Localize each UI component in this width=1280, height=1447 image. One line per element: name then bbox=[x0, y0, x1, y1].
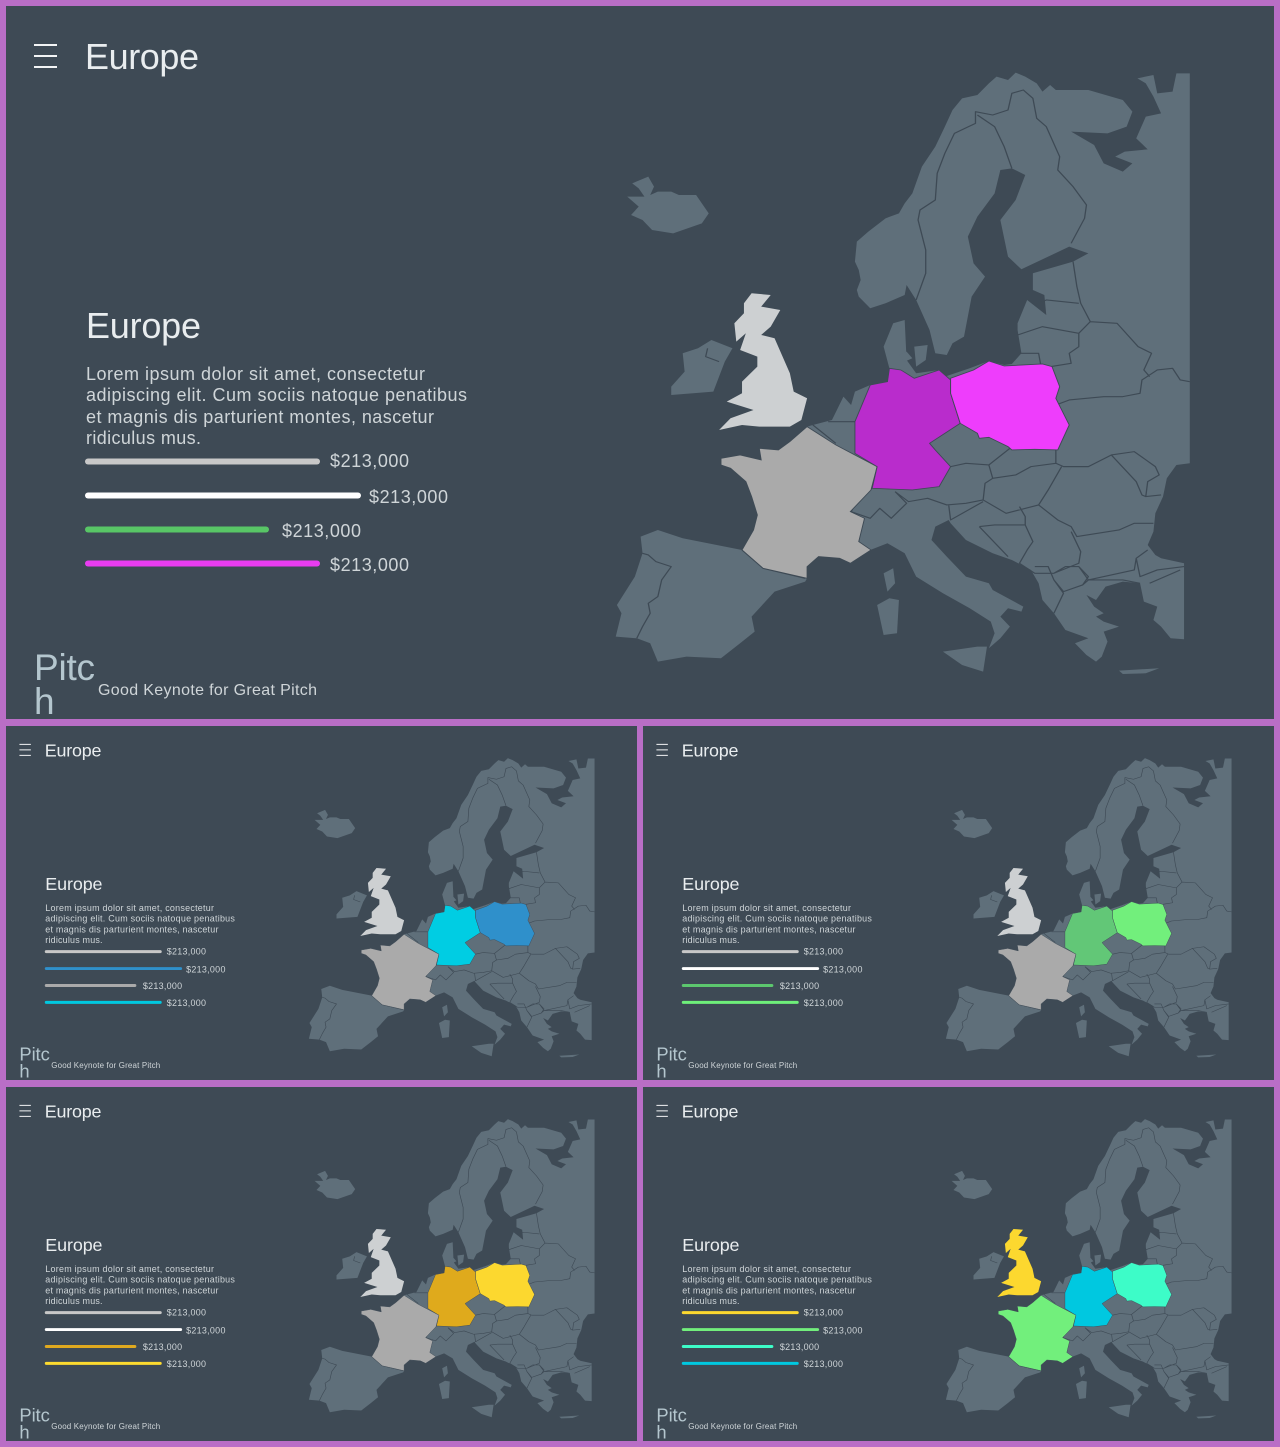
bar 2: $213,000 bbox=[823, 964, 862, 974]
body text bbox=[45, 903, 235, 945]
brand logo: Pitc bbox=[19, 1043, 50, 1064]
icon: menu bbox=[34, 45, 57, 67]
bar 1: $213,000 bbox=[804, 1307, 843, 1317]
country: France bbox=[998, 1295, 1076, 1371]
bar 3: $213,000 bbox=[282, 521, 361, 541]
map of Europe bbox=[616, 73, 1190, 674]
country: Germany bbox=[428, 1266, 480, 1327]
country: Germany bbox=[428, 905, 480, 966]
bar 3 bbox=[85, 521, 361, 541]
bar 1: $213,000 bbox=[804, 946, 843, 956]
bar 4 bbox=[85, 555, 409, 575]
bar 3: $213,000 bbox=[780, 981, 819, 991]
title: Europe bbox=[682, 740, 739, 760]
country: Poland bbox=[476, 1263, 535, 1307]
country: Germany bbox=[1065, 905, 1117, 966]
brand logo bbox=[19, 1043, 50, 1081]
bar 1: $213,000 bbox=[330, 451, 409, 471]
country: Germany bbox=[1065, 1266, 1117, 1327]
bar 4: $213,000 bbox=[330, 555, 409, 575]
bar 4: $213,000 bbox=[804, 998, 843, 1008]
country: United Kingdom bbox=[997, 1229, 1041, 1297]
bar 2: $213,000 bbox=[823, 1325, 862, 1335]
body text: Lorem ipsum dolor sit amet, consectetur bbox=[45, 1264, 214, 1274]
body text: adipiscing elit. Cum sociis natoque penatibus bbox=[682, 1275, 872, 1285]
tagline: Good Keynote for Great Pitch bbox=[688, 1061, 797, 1070]
body text: Lorem ipsum dolor sit amet, consectetur bbox=[45, 903, 214, 913]
title: Europe bbox=[682, 1101, 739, 1121]
country: France bbox=[721, 427, 877, 578]
country: France bbox=[361, 934, 439, 1010]
heading: Europe bbox=[682, 1235, 740, 1255]
bar 4: $213,000 bbox=[804, 1359, 843, 1369]
icon: menu bbox=[656, 1105, 668, 1116]
bar 3: $213,000 bbox=[143, 1342, 182, 1352]
bar 3 bbox=[682, 981, 819, 991]
brand logo: h bbox=[19, 1421, 30, 1442]
map of Europe bbox=[946, 1119, 1232, 1418]
body text: ridiculus mus. bbox=[682, 935, 740, 945]
country: Poland bbox=[476, 902, 535, 946]
body text: adipiscing elit. Cum sociis natoque penatibus bbox=[45, 1275, 235, 1285]
body text: ridiculus mus. bbox=[682, 1296, 740, 1306]
brand logo: Pitc bbox=[656, 1404, 687, 1425]
bar 3 bbox=[45, 981, 182, 991]
title: Europe bbox=[45, 740, 102, 760]
bar 3: $213,000 bbox=[780, 1342, 819, 1352]
brand logo bbox=[656, 1043, 687, 1081]
bar 1 bbox=[85, 451, 409, 471]
bar 4: $213,000 bbox=[167, 998, 206, 1008]
country: France bbox=[361, 1295, 439, 1371]
title: Europe bbox=[85, 36, 199, 77]
tagline: Good Keynote for Great Pitch bbox=[688, 1422, 797, 1431]
bar 3 bbox=[682, 1342, 819, 1352]
bar 3: $213,000 bbox=[143, 981, 182, 991]
panel: main slide bbox=[6, 6, 1274, 722]
country: Poland bbox=[1113, 902, 1172, 946]
country: Poland bbox=[1113, 1263, 1172, 1307]
brand logo: h bbox=[656, 1421, 667, 1442]
map of Europe bbox=[309, 1119, 595, 1418]
body text: et magnis dis parturient montes, nascetur bbox=[45, 1285, 218, 1295]
bar 2: $213,000 bbox=[186, 964, 225, 974]
brand logo: Pitc bbox=[34, 647, 95, 688]
body text bbox=[682, 1264, 872, 1306]
icon: menu bbox=[19, 1105, 31, 1116]
map of Europe bbox=[309, 758, 595, 1057]
body text: Lorem ipsum dolor sit amet, consectetur bbox=[682, 1264, 851, 1274]
icon: menu bbox=[19, 744, 31, 755]
panel: slide green bbox=[643, 726, 1274, 1081]
brand logo: h bbox=[34, 681, 55, 722]
body text: et magnis dis parturient montes, nascetur bbox=[682, 924, 855, 934]
panel: slide multicolour bbox=[643, 1087, 1274, 1442]
tagline: Good Keynote for Great Pitch bbox=[51, 1061, 160, 1070]
brand logo bbox=[34, 647, 95, 722]
body text: et magnis dis parturient montes, nascetur bbox=[45, 924, 218, 934]
heading: Europe bbox=[86, 305, 201, 346]
bar 1: $213,000 bbox=[167, 946, 206, 956]
body text: Lorem ipsum dolor sit amet, consectetur bbox=[682, 903, 851, 913]
title: Europe bbox=[45, 1101, 102, 1121]
body text: ridiculus mus. bbox=[45, 1296, 103, 1306]
body text: ridiculus mus. bbox=[45, 935, 103, 945]
heading: Europe bbox=[45, 874, 103, 894]
bar 2: $213,000 bbox=[369, 487, 448, 507]
map of Europe bbox=[946, 758, 1232, 1057]
body text: Lorem ipsum dolor sit amet, consectetur bbox=[86, 364, 425, 384]
brand logo: Pitc bbox=[656, 1043, 687, 1064]
heading: Europe bbox=[45, 1235, 103, 1255]
country: United Kingdom bbox=[360, 868, 404, 936]
body text: adipiscing elit. Cum sociis natoque penatibus bbox=[45, 914, 235, 924]
bar 2: $213,000 bbox=[186, 1325, 225, 1335]
country: Germany bbox=[855, 368, 960, 490]
body text bbox=[682, 903, 872, 945]
panel: slide yellow bbox=[6, 1087, 637, 1442]
body text bbox=[86, 364, 467, 448]
panel: slide blue bbox=[6, 726, 637, 1081]
country: United Kingdom bbox=[360, 1229, 404, 1297]
tagline: Good Keynote for Great Pitch bbox=[98, 682, 317, 699]
country: France bbox=[998, 934, 1076, 1010]
tagline: Good Keynote for Great Pitch bbox=[51, 1422, 160, 1431]
bar 3 bbox=[45, 1342, 182, 1352]
country: United Kingdom bbox=[997, 868, 1041, 936]
body text: adipiscing elit. Cum sociis natoque penatibus bbox=[86, 385, 467, 405]
body text: ridiculus mus. bbox=[86, 428, 201, 448]
brand logo: Pitc bbox=[19, 1404, 50, 1425]
body text: et magnis dis parturient montes, nascetur bbox=[682, 1285, 855, 1295]
bar 4: $213,000 bbox=[167, 1359, 206, 1369]
body text: et magnis dis parturient montes, nascetur bbox=[86, 407, 434, 427]
brand logo bbox=[19, 1404, 50, 1442]
heading: Europe bbox=[682, 874, 740, 894]
bar 2 bbox=[85, 487, 448, 507]
brand logo: h bbox=[19, 1060, 30, 1081]
body text bbox=[45, 1264, 235, 1306]
brand logo: h bbox=[656, 1060, 667, 1081]
body text: adipiscing elit. Cum sociis natoque penatibus bbox=[682, 914, 872, 924]
country: Poland bbox=[951, 361, 1069, 450]
country: United Kingdom bbox=[719, 293, 807, 430]
bar 1: $213,000 bbox=[167, 1307, 206, 1317]
icon: menu bbox=[656, 744, 668, 755]
brand logo bbox=[656, 1404, 687, 1442]
